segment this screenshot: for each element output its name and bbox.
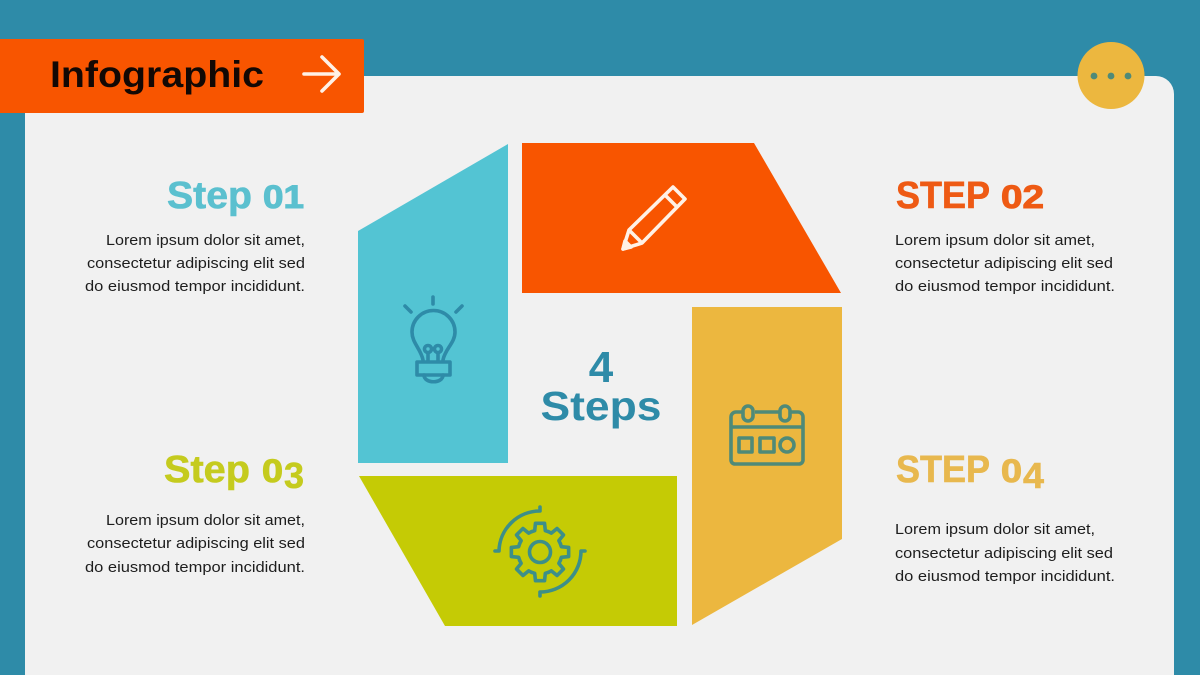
heading: step 03: 3 <box>284 455 304 496</box>
heading: step 03: 0 <box>262 453 283 489</box>
heading: step 04: 0 <box>1001 453 1022 489</box>
body: step 01: Lorem ipsum dolor sit amet, <box>106 232 305 249</box>
icon: light bulb <box>405 297 462 382</box>
body: step 01: do eiusmod tempor incididunt. <box>85 278 305 295</box>
body: step 01 <box>85 232 305 295</box>
heading: step 03: Step <box>164 449 250 491</box>
body: step 04 <box>895 521 1115 585</box>
body: step 02: do eiusmod tempor incididunt. <box>895 278 1115 295</box>
body: step 03: Lorem ipsum dolor sit amet, <box>106 512 305 529</box>
panel: step 02 shape <box>522 143 841 293</box>
body: step 02 <box>895 232 1115 295</box>
icon: arrow <box>304 57 339 91</box>
body: step 02: consectetur adipiscing elit sed <box>895 255 1113 272</box>
text block: step 03 <box>85 449 305 576</box>
heading: step 04: STEP <box>896 449 990 491</box>
text block: step 02 <box>895 175 1115 295</box>
body: step 03 <box>85 512 305 576</box>
heading: step 01: Step <box>167 175 252 217</box>
heading: step 01: 01 <box>263 179 304 215</box>
icon: menu dots badge <box>1078 42 1144 109</box>
body: step 04: consectetur adipiscing elit sed <box>895 545 1113 562</box>
panel: step 01 shape <box>358 144 508 463</box>
heading: step 02: STEP <box>896 175 990 217</box>
heading: step 04: 4 <box>1023 455 1044 496</box>
body: step 01: consectetur adipiscing elit sed <box>87 255 305 272</box>
body: step 04: do eiusmod tempor incididunt. <box>895 568 1115 585</box>
icon: gear with cycle arrows <box>495 507 585 596</box>
icon: pencil <box>623 187 685 249</box>
title: Infographic <box>50 54 264 95</box>
center label <box>540 343 662 429</box>
icon: calendar <box>731 406 803 464</box>
center label: Steps <box>540 383 662 429</box>
title banner <box>0 39 364 113</box>
text block: step 04 <box>895 449 1115 585</box>
text block: step 01 <box>85 175 305 295</box>
panel: step 04 shape <box>692 307 842 625</box>
body: step 02: Lorem ipsum dolor sit amet, <box>895 232 1095 249</box>
body: step 04: Lorem ipsum dolor sit amet, <box>895 521 1095 538</box>
center label: 4 <box>589 343 614 392</box>
panel: step 03 shape <box>359 476 677 626</box>
body: step 03: do eiusmod tempor incididunt. <box>85 559 305 576</box>
heading: step 02: 02 <box>1001 179 1044 215</box>
body: step 03: consectetur adipiscing elit sed <box>87 535 305 552</box>
